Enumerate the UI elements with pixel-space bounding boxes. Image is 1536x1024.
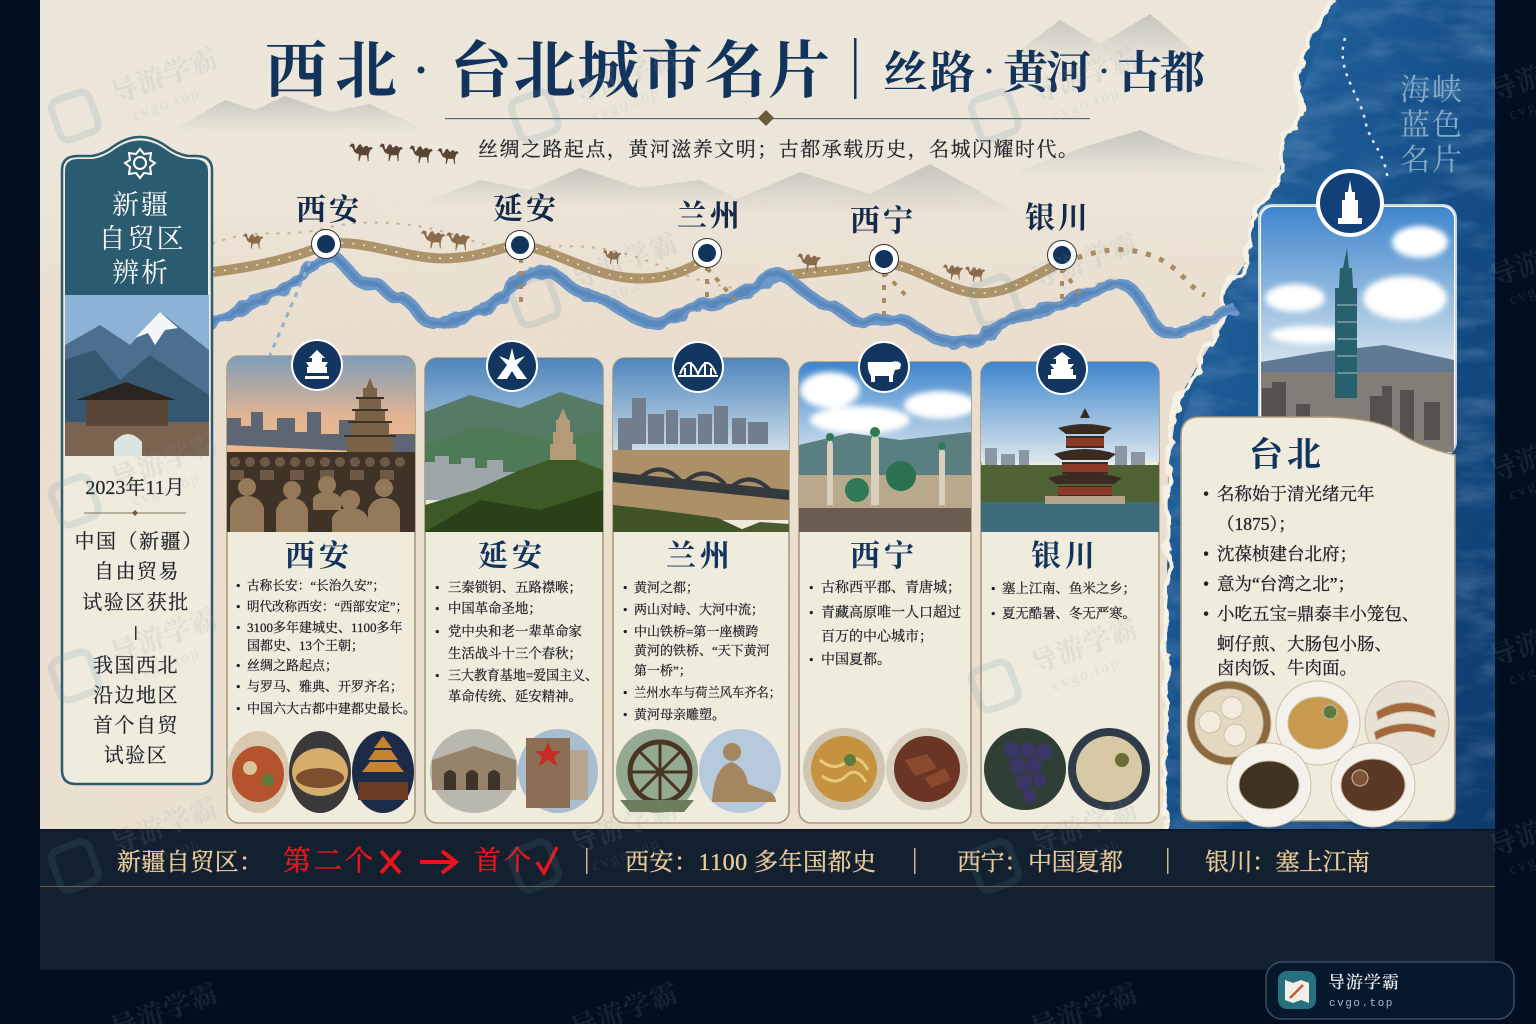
card title: 西安: [285, 540, 353, 573]
bullets: 小吃五宝=鼎泰丰小笼包、: [1217, 604, 1419, 624]
tagline: 丝绸之路起点，黄河滋养文明；古都承载历史，名城闪耀时代。: [478, 138, 1078, 161]
bullets: [809, 579, 961, 668]
bullets: 党中央和老一辈革命家: [448, 623, 582, 639]
title ornament line: [445, 110, 1090, 126]
bullets: （1875）；: [1217, 514, 1296, 534]
bullets: 夏无酷暑、冬无严寒。: [1002, 606, 1136, 621]
card: Lanzhou: [613, 341, 789, 823]
route map: Silk Road and Yellow River: [210, 222, 1235, 355]
camels on route: [243, 230, 985, 282]
logo badge: cvgo.top: [1329, 998, 1394, 1010]
card title: 兰州: [666, 540, 734, 573]
bullets: •: [991, 606, 996, 621]
body text: [74, 530, 204, 767]
bullets: •: [236, 701, 241, 716]
panel title: [98, 190, 186, 288]
body text: 中国（新疆）: [74, 530, 204, 553]
icon: pagoda: [291, 339, 343, 391]
bullets: •: [236, 599, 241, 614]
body text: 试验区获批: [82, 591, 190, 614]
bullets: 古称西平郡、青唐城；: [821, 579, 961, 596]
ocean: Taiwan strait: [1165, 0, 1495, 830]
city nodes and labels: [296, 193, 1091, 274]
icon: pagoda: [1036, 343, 1088, 395]
bullets: [236, 578, 416, 716]
strait label: 名片: [1400, 144, 1464, 177]
bullets: 丝绸之路起点；: [247, 658, 338, 673]
photo: Yan'an pagoda hill: [425, 358, 603, 532]
bullets: 与罗马、雅典、开罗齐名；: [247, 679, 403, 694]
camel caravan: [349, 143, 459, 164]
photo: Xinjiang gate: [65, 295, 209, 456]
card title: 银川: [1031, 540, 1099, 573]
watermarks: cvgo.top: [130, 834, 203, 875]
body text: 自由贸易: [94, 560, 180, 583]
card: Yinchuan: [981, 343, 1159, 823]
watermarks: cvgo.top: [1050, 269, 1123, 310]
key fact: Xi'an: 西安：1100 多年国都史: [625, 849, 878, 876]
bullets: 中山铁桥=第一座横跨: [634, 624, 758, 639]
bullets: 3100多年建城史、1100多年: [247, 620, 403, 635]
bottom summary band: [40, 829, 1495, 970]
city nodes and labels: 西安: [296, 194, 362, 227]
bullets: [1203, 484, 1419, 678]
bullets: •: [1203, 604, 1209, 624]
connectors: [521, 258, 1080, 315]
watermarks: cvgo.top: [130, 644, 203, 685]
body text: 试验区: [104, 744, 168, 767]
watermarks: 导游学霸: [1027, 228, 1142, 294]
photo: Xi'an pagoda and terracotta warriors: [227, 356, 415, 532]
bullets: •: [236, 658, 241, 673]
watermarks: 导游学霸: [107, 428, 222, 494]
panel: Xinjiang FTZ: [62, 137, 212, 784]
panel header: [65, 140, 208, 295]
watermarks: 导游学霸: [107, 793, 222, 859]
watermarks: cvgo.top: [590, 834, 663, 875]
bullets: 黄河母亲雕塑。: [634, 707, 725, 722]
photos: waterwheel and statue: [616, 729, 781, 813]
icon: tower: [486, 340, 538, 392]
bullets: •: [809, 580, 814, 595]
bullets: 意为“台湾之北”；: [1217, 574, 1355, 594]
panel: Taipei: [1181, 169, 1456, 827]
body text: 沿边地区: [93, 684, 179, 707]
key fact: Yinchuan: 银川：塞上江南: [1205, 849, 1372, 876]
icon: bridge: [672, 341, 724, 393]
watermarks: 导游学霸: [107, 43, 222, 109]
icon: Taipei 101: [1316, 169, 1384, 237]
watermarks: cvgo.top: [1050, 654, 1123, 695]
title: 丝路: [883, 48, 975, 98]
city nodes and labels: 延安: [493, 193, 559, 226]
photos: five Taipei snacks: [1187, 681, 1449, 827]
bullets: 中国六大古都中建都史最长。: [247, 701, 416, 716]
bullets: •: [435, 601, 440, 616]
key fact: Xining: 西宁：中国夏都: [957, 849, 1125, 876]
bullets: •: [1203, 484, 1209, 504]
panel title: 辨析: [112, 258, 170, 288]
bullets: •: [809, 652, 814, 667]
body text: 我国西北: [93, 654, 179, 677]
photos: food: [227, 731, 414, 813]
bullets: •: [236, 620, 241, 635]
bullets: 黄河之都；: [634, 580, 699, 595]
card title: 台北: [1249, 436, 1325, 474]
photo: Yinchuan tower: [981, 362, 1159, 532]
key takeaway: Xinjiang FTZ: 首个: [474, 846, 534, 876]
city nodes and labels: 银川: [1025, 202, 1091, 235]
date: 2023年11月: [85, 476, 185, 499]
photo: Xining mosque: [799, 362, 976, 532]
bullets: •: [1203, 574, 1209, 594]
body text: 首个自贸: [93, 714, 179, 737]
watermarks: 导游学霸: [1027, 793, 1142, 859]
city nodes and labels: 兰州: [677, 200, 743, 233]
watermarks: 导游学霸: [567, 793, 682, 859]
bullets: [991, 580, 1136, 621]
strait label: 海峡: [1400, 74, 1464, 107]
bullets: 黄河的铁桥、“天下黄河: [634, 643, 770, 658]
photos: food: [803, 728, 968, 810]
watermarks: 导游学霸: [567, 43, 682, 109]
bullets: 卤肉饭、牛肉面。: [1217, 658, 1357, 678]
bullets: [623, 580, 781, 722]
ink mountains: [170, 14, 1280, 215]
key takeaway: Xinjiang FTZ: 新疆自贸区：: [117, 849, 265, 876]
watermarks: cvgo.top: [590, 84, 663, 125]
strait label: 蓝色: [1400, 109, 1464, 142]
bullets: 兰州水车与荷兰风车齐名；: [634, 685, 781, 700]
panel title: 自贸区: [98, 224, 186, 254]
watermarks: cvgo.top: [1050, 834, 1123, 875]
bullets: 百万的中心城市；: [821, 628, 933, 645]
photos: grapes and rice: [984, 728, 1150, 810]
bullets: •: [435, 580, 440, 595]
bullets: 三大教育基地=爱国主义、: [448, 667, 598, 683]
bullets: •: [623, 602, 628, 617]
bullets: 生活战斗十三个春秋；: [448, 645, 582, 661]
bullets: 古称长安：“长治久安”；: [247, 578, 385, 593]
photo: Taipei 101 skyline: [1259, 205, 1456, 457]
watermarks: 导游学霸: [567, 228, 682, 294]
bullets: •: [623, 685, 628, 700]
parchment map background: [40, 0, 1340, 830]
bullets: •: [236, 578, 241, 593]
bullets: •: [435, 624, 440, 639]
card title: 西宁: [850, 540, 918, 573]
watermarks: cvgo.top: [1050, 84, 1123, 125]
bullets: 塞上江南、鱼米之乡；: [1002, 580, 1136, 596]
bullets: 沈葆桢建台北府；: [1217, 544, 1357, 564]
title: 黄河: [1003, 48, 1091, 98]
watermarks: cvgo.top: [130, 84, 203, 125]
watermarks: cvgo.top: [130, 469, 203, 510]
bullets: 蚵仔煎、大肠包小肠、: [1217, 634, 1392, 654]
bullets: 中国革命圣地；: [448, 600, 542, 616]
watermarks: 导游学霸: [1027, 43, 1142, 109]
bullets: 两山对峙、大河中流；: [634, 602, 764, 617]
bullets: •: [435, 668, 440, 683]
bullets: 革命传统、延安精神。: [448, 688, 582, 704]
bullets: 青藏高原唯一人口超过: [821, 604, 961, 621]
card: Yan'an: [425, 340, 603, 823]
bullets: •: [623, 707, 628, 722]
bullets: 三秦锁钥、五路襟喉；: [448, 579, 582, 595]
city nodes and labels: 西宁: [850, 205, 916, 238]
bullets: •: [991, 581, 996, 596]
watermarks: 导游学霸: [107, 603, 222, 669]
bullets: 中国夏都。: [821, 651, 891, 668]
bullets: [435, 579, 598, 704]
key takeaway: Xinjiang FTZ: 第二个: [283, 845, 376, 877]
watermarks: cvgo.top: [590, 269, 663, 310]
bullets: 第一桥”；: [634, 663, 692, 678]
title: 台北城市名片: [450, 38, 830, 106]
photo: Lanzhou bridge and river: [613, 358, 789, 532]
card title: 延安: [478, 540, 546, 573]
card: Xining: [799, 341, 976, 823]
bullets: 名称始于清光绪元年: [1217, 484, 1374, 504]
watermarks: 导游学霸: [1027, 613, 1142, 679]
title: [265, 38, 1205, 106]
icon: yak: [858, 341, 910, 393]
panel title: 新疆: [112, 190, 170, 220]
title: 西北: [265, 38, 397, 106]
bullets: •: [623, 580, 628, 595]
bullets: •: [623, 624, 628, 639]
strait label: [1400, 74, 1464, 177]
bullets: •: [236, 679, 241, 694]
silk road band: [213, 243, 1064, 293]
bullets: •: [1203, 544, 1209, 564]
bullets: 明代改称西安：“西部安定”；: [247, 599, 408, 614]
card: Xi'an: [227, 339, 416, 823]
bullets: •: [809, 605, 814, 620]
yellow river: [210, 256, 1235, 343]
photos: Yan'an sites: [430, 729, 598, 813]
title: 古都: [1117, 48, 1205, 98]
logo badge: 导游学霸: [1328, 973, 1400, 992]
logo badge: [1266, 962, 1514, 1019]
key takeaway: Xinjiang FTZ: [117, 845, 557, 877]
text card: [1181, 417, 1455, 821]
bullets: 国都史、13个王朝；: [247, 638, 364, 653]
icon: ornament: [125, 149, 155, 178]
